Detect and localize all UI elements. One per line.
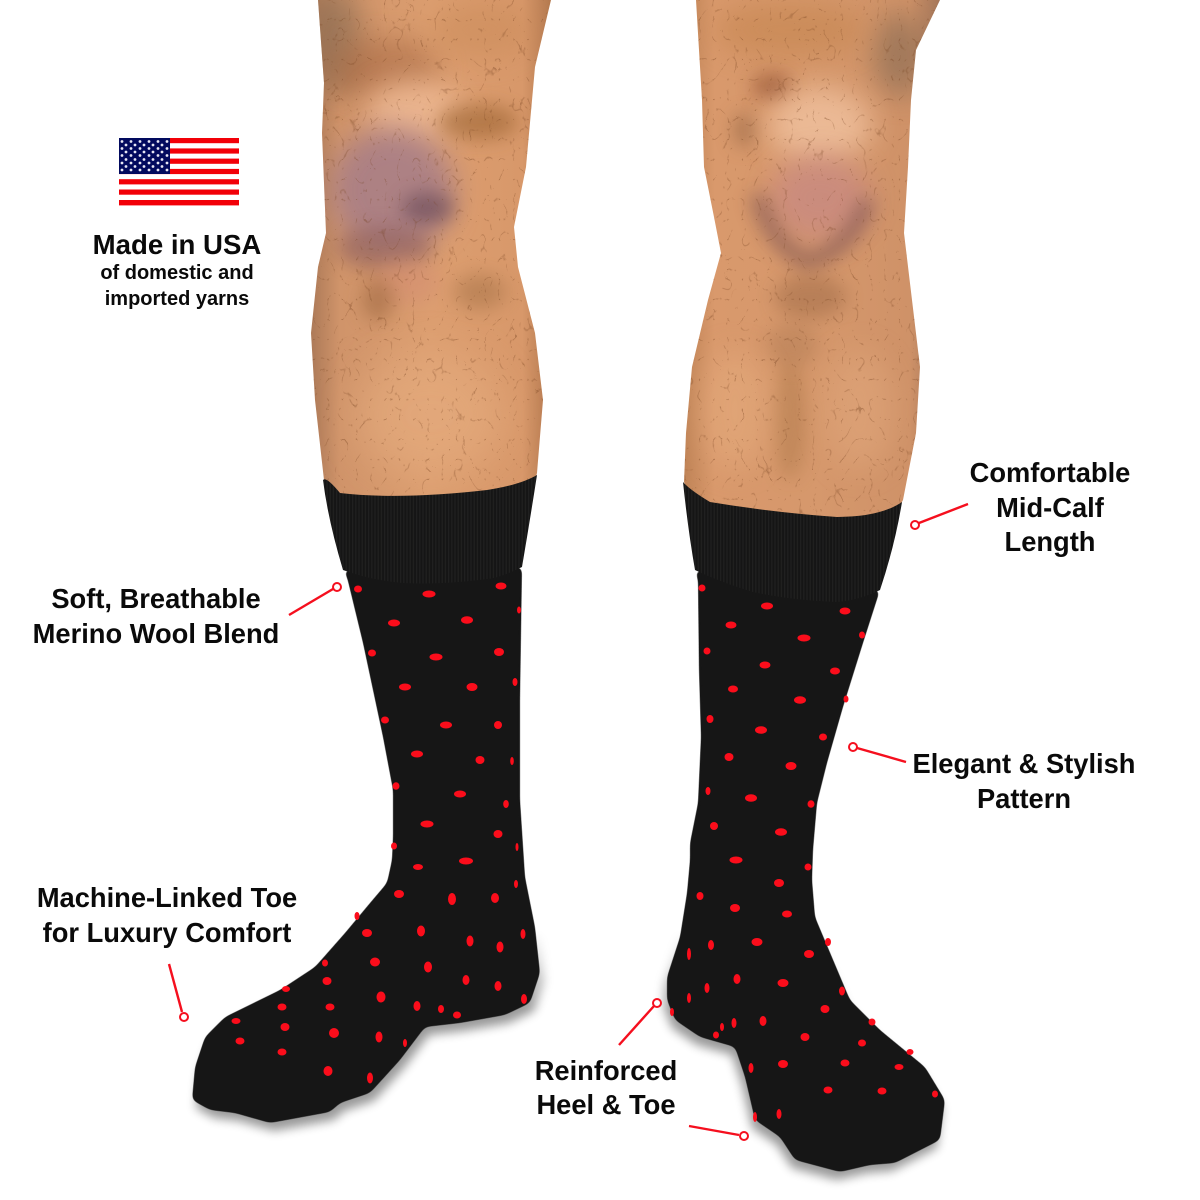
callout: reinforced heel and toe	[535, 999, 748, 1140]
callout: reinforced heel and toe: Reinforced	[535, 1055, 677, 1086]
callout: elegant pattern: Pattern	[977, 783, 1071, 814]
callout: mid-calf length: Length	[1005, 526, 1095, 557]
callout: soft merino wool blend: Soft, Breathable	[51, 583, 261, 614]
text: of domestic and imported yarns: of domestic and	[100, 262, 254, 284]
callout: machine-linked toe	[37, 882, 297, 1021]
sock dots: right	[670, 584, 938, 1122]
callout: machine-linked toe: for Luxury Comfort	[43, 917, 291, 948]
callout: soft merino wool blend: Merino Wool Blend	[33, 618, 279, 649]
callout: mid-calf length: Comfortable	[970, 457, 1130, 488]
callout: reinforced heel and toe: Heel & Toe	[536, 1089, 676, 1120]
callout: soft merino wool blend	[33, 583, 341, 649]
callout: mid-calf length: Mid-Calf	[996, 492, 1105, 523]
sock: right	[664, 482, 945, 1180]
text: of domestic and imported yarns	[100, 262, 254, 310]
callout: machine-linked toe: Machine-Linked Toe	[37, 882, 297, 913]
leg: left	[309, 0, 551, 505]
heading: Made in USA: Made in USA	[93, 229, 261, 260]
callout: elegant pattern	[849, 743, 1135, 814]
text: of domestic and imported yarns: imported yarns	[105, 288, 249, 310]
sock: left	[192, 475, 544, 1131]
sock cuff: left	[323, 475, 537, 584]
sock dots: left	[232, 582, 527, 1084]
callout: mid-calf length	[911, 457, 1130, 557]
icon: American flag	[119, 138, 239, 206]
callout: elegant pattern: Elegant & Stylish	[913, 748, 1135, 779]
leg: right	[684, 0, 940, 525]
leg hair texture	[300, 0, 950, 530]
sock cuff: right	[683, 482, 902, 602]
